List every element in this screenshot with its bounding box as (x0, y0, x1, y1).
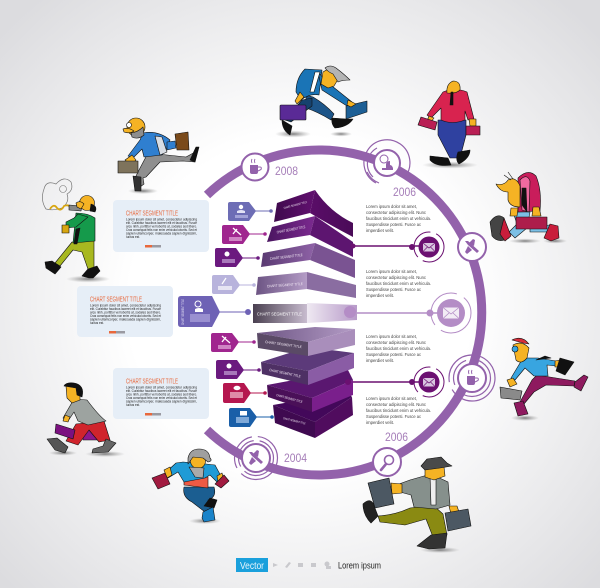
tag 3: coffee (215, 248, 260, 267)
slab 5 centre: CHART SEGMENT TITLE (257, 312, 302, 316)
panel 3 body: arcu nibh, porttitor vel lobortis at, sodales sed libero. (126, 392, 197, 396)
character: man with hat and slate case (363, 457, 471, 553)
panel 1 body: Cras consequat felis non enim vehicula lobortis. Sed et (126, 228, 197, 232)
slab 8: CHART SEGMENT TITLE (276, 393, 303, 404)
panel 3 body: elit. Curabitur faucibus laoreet elit et faucibus. Fusce (126, 389, 197, 393)
text block right 2: consectetur adipiscing elit. Nunc (366, 275, 426, 281)
text block right 1: consectetur adipiscing elit. Nunc (366, 210, 426, 216)
panel 1 heading: CHART SEGMENT TITLE (126, 210, 178, 218)
text block right 2: imperdiet velit. (366, 293, 394, 299)
slab 7 (261, 347, 354, 385)
slab 2 (267, 216, 353, 257)
panel 2 body (90, 304, 161, 325)
footer: lorem ipsum: Lorem ipsum (338, 560, 381, 572)
text block right 4 (366, 396, 431, 426)
footer: small icons (273, 562, 331, 569)
panel 1 body (126, 218, 197, 239)
node: magnifier (373, 448, 401, 476)
slab 6: CHART SEGMENT TITLE (265, 340, 303, 349)
text block right 1: Suspendisse potenti. Fusce ac (366, 222, 421, 228)
panel 2 body: elit. Curabitur faucibus laoreet elit et faucibus. Fusce (90, 307, 161, 311)
tag 8: speech (223, 383, 267, 403)
slab 6 (257, 327, 355, 356)
slab 7: CHART SEGMENT TITLE (269, 368, 301, 379)
panel: segment 3 (113, 368, 209, 419)
character: wild-haired old man (152, 449, 229, 524)
character: running man in blue suit (275, 66, 367, 138)
text block right 2: Lorem ipsum dolor sit amet, (366, 269, 417, 275)
year 2006 lower: 2006 (385, 432, 408, 444)
slab 1 (274, 190, 353, 237)
footer: vector badge: Vector (240, 560, 264, 572)
panel 2 heading: CHART SEGMENT TITLE (90, 296, 142, 304)
panel 3 heading: CHART SEGMENT TITLE (126, 378, 178, 386)
panel 2 body: Cras consequat felis non enim vehicula lobortis. Sed et (90, 314, 161, 318)
tag 9: mail (229, 408, 274, 427)
slab 8 (267, 370, 353, 412)
text block right 4: faucibus tincidunt enim ut vehicula. (366, 408, 431, 414)
tag 7: coffee (216, 360, 261, 379)
panel 1 body: luctus est. (126, 235, 140, 239)
tag 5: large person (178, 296, 251, 327)
timeline arc (207, 150, 482, 475)
node: plane lower (234, 436, 278, 480)
slab 4: CHART SEGMENT TITLE (267, 282, 303, 288)
panel 3 body: sapien ullamcorper, malesuada sapien dignissim, (126, 400, 197, 404)
tag 4: key (212, 275, 256, 294)
panel 2 body: sapien ullamcorper, malesuada sapien dignissim, (90, 318, 161, 322)
panel 3 body: luctus est. (126, 403, 140, 407)
text block right 1: imperdiet velit. (366, 228, 394, 234)
panel: segment 1 (113, 200, 209, 252)
text block right 2: faucibus tincidunt enim ut vehicula. (366, 281, 431, 287)
node: coffee 2008 (242, 154, 268, 180)
panel 1 body: Lorem ipsum dolor sit amet, consectetur adipiscing (126, 218, 197, 222)
slab 4 (256, 272, 356, 298)
3d stack (253, 190, 357, 438)
tag 5: large person: CHART SEGMENT TITLE (181, 298, 185, 325)
character: man smoking a pipe in green shirt (42, 179, 110, 282)
panel 3 body: Cras consequat felis non enim vehicula lobortis. Sed et (126, 396, 197, 400)
panel: segment 2 (77, 286, 173, 337)
tag 1: person (228, 202, 273, 221)
node dots on stack (344, 244, 356, 385)
character: man with blue jacket and glasses (118, 118, 199, 194)
panel 1 body: arcu nibh, porttitor vel lobortis at, sodales sed libero. (126, 224, 197, 228)
text block right 4: Suspendisse potenti. Fusce ac (366, 414, 421, 420)
text block right 3 (366, 334, 431, 364)
year 2004: 2004 (284, 453, 308, 465)
character: man with grey jacket and red trousers (47, 383, 125, 457)
year 2006 upper: 2006 (393, 187, 416, 199)
tag 2: plane (222, 225, 267, 244)
text block right 1: Lorem ipsum dolor sit amet, (366, 204, 417, 210)
character: man in red sweater (418, 81, 480, 168)
text block right 4: Lorem ipsum dolor sit amet, (366, 396, 417, 402)
text block right 3: Lorem ipsum dolor sit amet, (366, 334, 417, 340)
year 2008: 2008 (275, 166, 298, 178)
connector lines to envelopes (352, 246, 440, 382)
text block right 2 (366, 269, 431, 299)
slab 9 (273, 392, 353, 438)
envelope node top (409, 232, 444, 262)
text block right 4: consectetur adipiscing elit. Nunc (366, 402, 426, 408)
panel 3 body (126, 386, 197, 407)
text block right 3: consectetur adipiscing elit. Nunc (366, 340, 426, 346)
slab 3: CHART SEGMENT TITLE (270, 253, 303, 261)
panel 2 body: arcu nibh, porttitor vel lobortis at, sodales sed libero. (90, 310, 161, 314)
panel 2 body: Lorem ipsum dolor sit amet, consectetur adipiscing (90, 304, 161, 308)
slab 1: CHART SEGMENT TITLE (283, 200, 308, 210)
text block right 4: imperdiet velit. (366, 420, 394, 426)
panel 1 slider (145, 245, 161, 248)
slab 9: CHART SEGMENT TITLE (283, 416, 306, 426)
text block right 3: Suspendisse potenti. Fusce ac (366, 352, 421, 358)
node: person 2006 (364, 140, 410, 183)
character: hunched man with pink hump (490, 172, 567, 244)
slab 2: CHART SEGMENT TITLE (276, 225, 306, 234)
panel 3 body: Lorem ipsum dolor sit amet, consectetur adipiscing (126, 386, 197, 390)
text block right 1: faucibus tincidunt enim ut vehicula. (366, 216, 431, 222)
panel 1 body: sapien ullamcorper, malesuada sapien dignissim, (126, 232, 197, 236)
panel 2 body: luctus est. (90, 321, 104, 325)
text block right 3: imperdiet velit. (366, 358, 394, 364)
text block right 1 (366, 204, 431, 234)
panel 3 slider (145, 413, 161, 416)
slab 5 centre (253, 303, 357, 323)
panel 1 body: elit. Curabitur faucibus laoreet elit et faucibus. Fusce (126, 221, 197, 225)
panel 2 slider (109, 331, 125, 334)
tag 6: plane (211, 333, 256, 352)
node: plane upper (458, 233, 486, 261)
text block right 2: Suspendisse potenti. Fusce ac (366, 287, 421, 293)
character: running man with glasses and black case (500, 338, 588, 421)
slab 3 (261, 243, 355, 278)
text block right 3: faucibus tincidunt enim ut vehicula. (366, 346, 431, 352)
envelope node bottom (409, 367, 444, 397)
node: coffee lower (449, 355, 495, 401)
envelope node middle (426, 293, 471, 333)
